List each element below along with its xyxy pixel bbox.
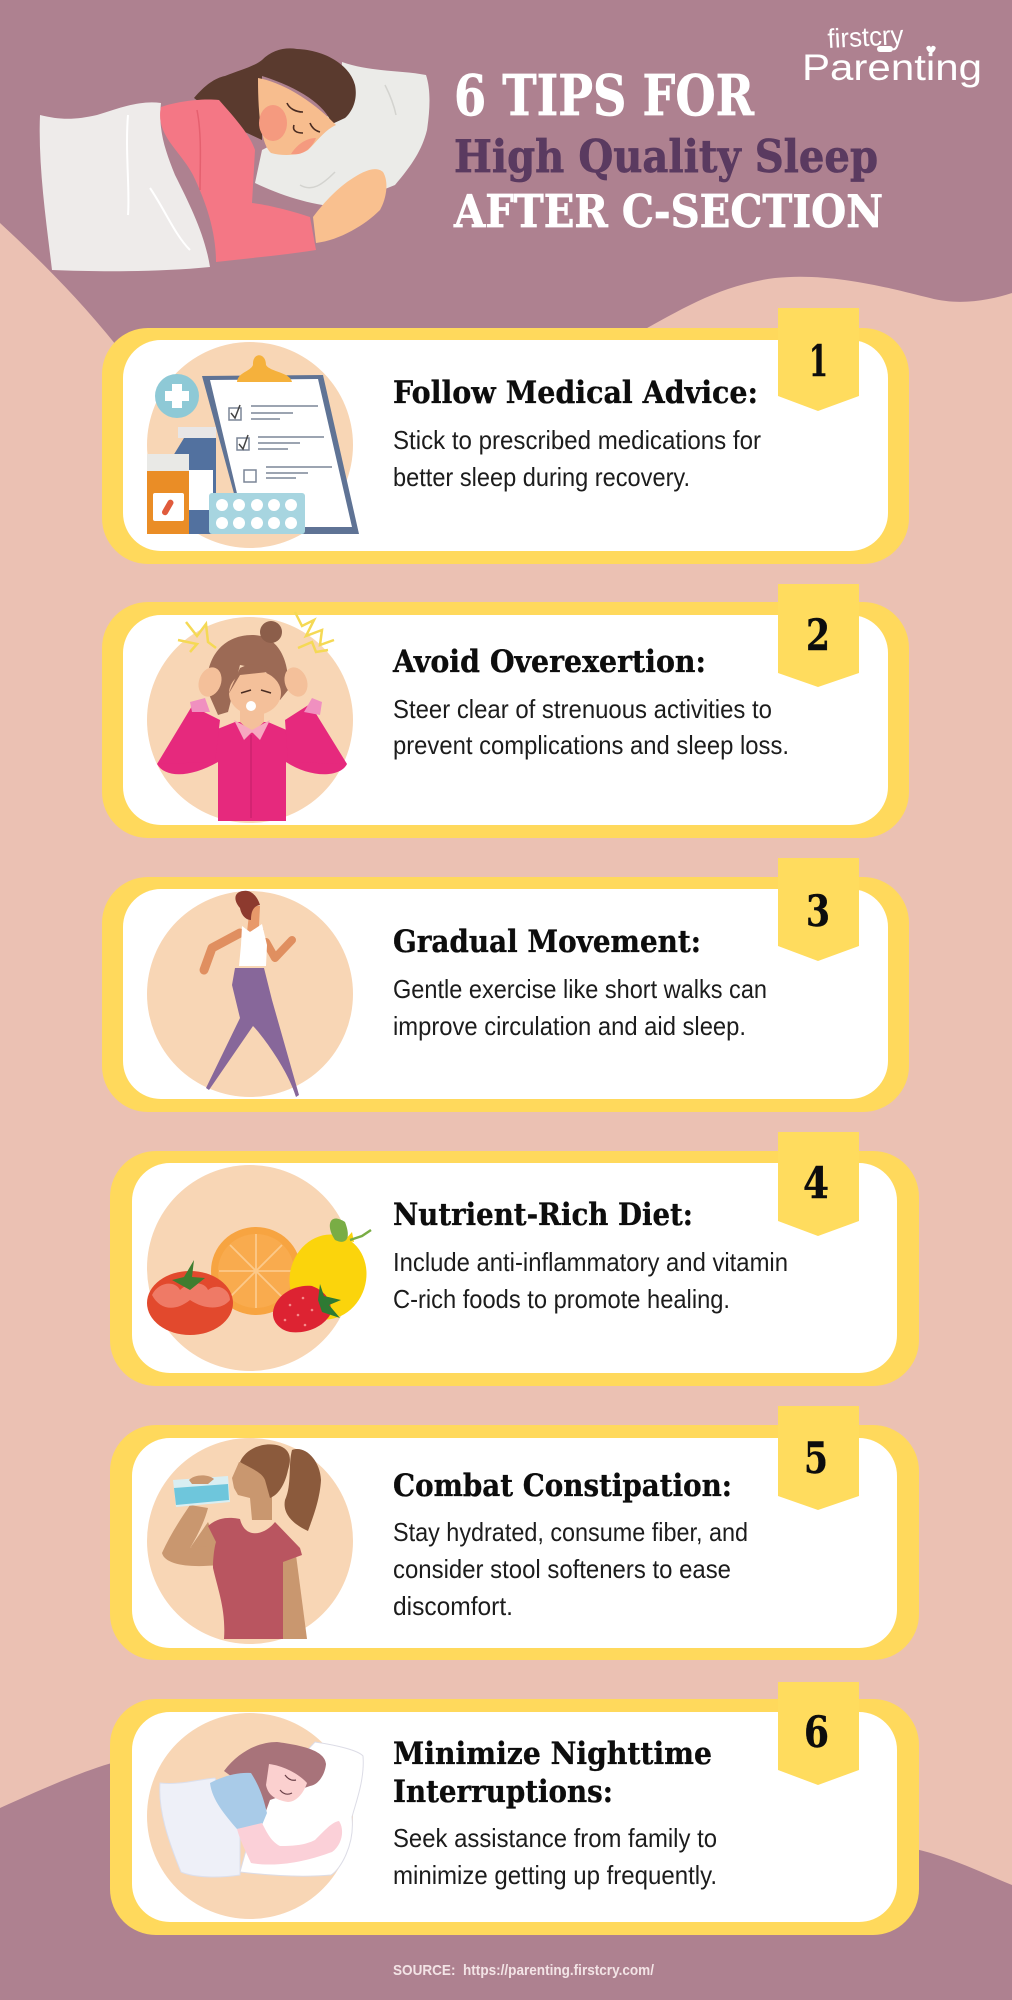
text: tip 5: [393, 1468, 748, 1621]
panel: tip 6: [110, 1682, 919, 1935]
badge: number 6: 6: [804, 1708, 829, 1758]
text: tip 3: Gradual Movement:: [393, 924, 701, 960]
badge: number 3: [778, 858, 859, 961]
badge: number 1: 1: [809, 337, 828, 387]
text: tip 1: Stick to prescribed medications for: [393, 425, 761, 455]
text: tip 3: Gentle exercise like short walks can: [393, 974, 767, 1004]
text: tip 4: Include anti-inflammatory and vitamin: [393, 1247, 788, 1277]
text: tip 2: Steer clear of strenuous activities to: [393, 694, 772, 724]
logo: FirstCry Parenting: Parenting: [802, 47, 982, 88]
panel: tip 4: [110, 1132, 919, 1386]
text: tip 4: C-rich foods to promote healing.: [393, 1284, 730, 1314]
icon: woman sleeping with pillow: [147, 1713, 363, 1919]
title: 6 TIPS FOR: [454, 63, 754, 129]
badge: number 6: [778, 1682, 859, 1785]
text: tip 5: consider stool softeners to ease: [393, 1554, 731, 1584]
badge: number 1: [778, 308, 859, 411]
text: tip 6: Seek assistance from family to: [393, 1823, 717, 1853]
text: tip 5: Combat Constipation:: [393, 1468, 732, 1504]
panel: tip 3: [102, 858, 909, 1112]
text: tip 1: [393, 375, 761, 492]
title: High Quality Sleep: [454, 130, 878, 183]
text: tip 5: Stay hydrated, consume fiber, and: [393, 1517, 748, 1547]
title: AFTER C-SECTION: [453, 185, 883, 238]
panel: tip 1: [102, 308, 909, 564]
badge: number 5: 5: [804, 1434, 828, 1484]
icon: woman drinking water: [147, 1438, 353, 1644]
text: tip 6: [393, 1736, 717, 1890]
text: tip 6: Interruptions:: [393, 1774, 613, 1810]
text: tip 2: [392, 644, 789, 760]
text: tip 2: prevent complications and sleep loss.: [393, 730, 789, 760]
text: tip 3: [393, 924, 767, 1041]
logo: FirstCry Parenting: [802, 20, 982, 88]
badge: number 2: 2: [806, 611, 830, 661]
icon: circle with clipboard and medicines: [147, 342, 359, 548]
source line: SOURCE: https://parenting.firstcry.com/: [393, 1962, 655, 1979]
badge: number 5: [778, 1406, 859, 1510]
text: tip 3: improve circulation and aid sleep.: [393, 1011, 746, 1041]
text: tip 1: better sleep during recovery.: [393, 462, 690, 492]
text: tip 2: Avoid Overexertion:: [392, 644, 706, 680]
illustration: sleeping woman: [40, 48, 430, 271]
badge: number 4: [778, 1132, 859, 1236]
bottom background wave: [0, 1762, 1012, 2000]
icon: fruits: [147, 1165, 377, 1371]
badge: number 4: 4: [803, 1159, 829, 1209]
badge: number 2: [778, 584, 859, 687]
icon: walking woman: [147, 891, 353, 1097]
panel: tip 5: [110, 1406, 919, 1660]
logo: FirstCry Parenting: firstcry: [827, 20, 905, 54]
top background wave: [0, 0, 1012, 345]
panel: tip 2: [102, 584, 909, 838]
text: tip 4: [393, 1197, 788, 1314]
text: tip 6: minimize getting up frequently.: [393, 1860, 717, 1890]
text: tip 6: Minimize Nighttime: [393, 1736, 712, 1772]
title: [453, 63, 883, 238]
text: tip 1: Follow Medical Advice:: [393, 375, 758, 411]
text: tip 5: discomfort.: [393, 1591, 513, 1621]
icon: stressed woman: [147, 612, 353, 823]
text: tip 4: Nutrient-Rich Diet:: [393, 1197, 693, 1233]
badge: number 3: 3: [806, 887, 830, 937]
